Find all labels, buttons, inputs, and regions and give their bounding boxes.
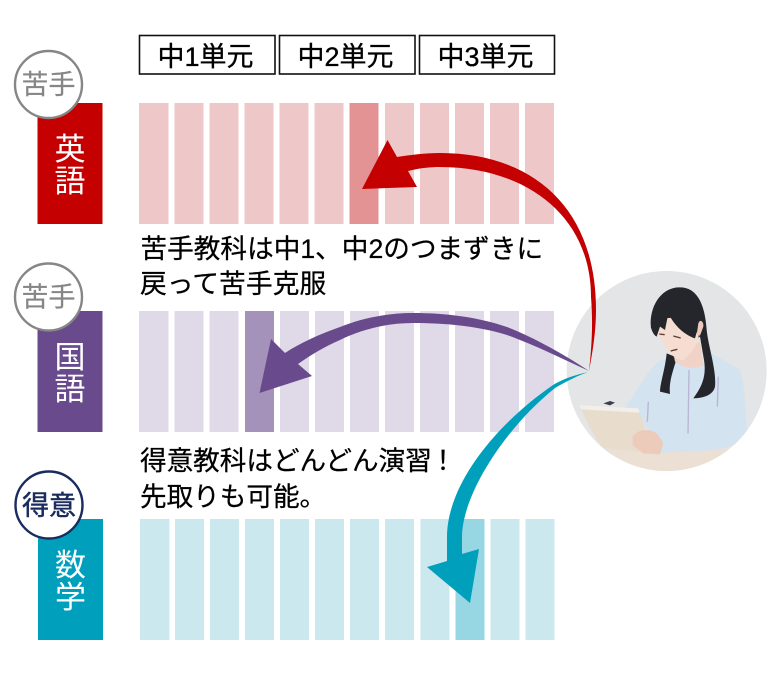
- header: grade 1 units: [140, 36, 275, 74]
- arrow: teal, to Math grade 3 unit: [427, 372, 588, 603]
- subject label: Japanese: [38, 311, 102, 432]
- shirt seams: [647, 370, 718, 433]
- pen: [603, 401, 615, 405]
- neck: [673, 342, 703, 368]
- shirt: [625, 353, 747, 453]
- English unit bars: [139, 103, 554, 224]
- text: weak subjects advice: 苦手教科は中1、中2のつまずきに: [140, 234, 543, 264]
- unit header row: [140, 36, 554, 74]
- eyes and mouth: [659, 334, 681, 351]
- subject label: Math: [38, 519, 103, 640]
- desk: [605, 450, 728, 471]
- text: strong subjects advice: 先取りも可能。: [140, 482, 326, 512]
- subject label: English: [38, 103, 102, 224]
- badge: weak subject (English): [15, 51, 82, 118]
- badge: strong subject (Math): 得意: [22, 491, 76, 521]
- header: grade 2 units: [280, 36, 415, 74]
- badge: strong subject (Math): [16, 472, 82, 538]
- text: weak subjects advice: 戻って苦手克服: [140, 269, 326, 299]
- text: weak subjects advice: [140, 234, 543, 299]
- subject label: Japanese: 国: [54, 340, 86, 375]
- header: grade 2 units: 中2単元: [297, 42, 394, 72]
- header: grade 3 units: [420, 36, 554, 74]
- header: grade 1 units: 中1単元: [157, 42, 254, 72]
- text: strong subjects advice: 得意教科はどんどん演習！: [140, 446, 456, 476]
- subject label: English: 英: [54, 132, 86, 167]
- Math unit bars: [140, 519, 554, 640]
- face: [655, 318, 699, 360]
- badge: weak subject (English): 苦手: [22, 70, 76, 100]
- fringe: [650, 318, 697, 338]
- text: strong subjects advice: [140, 446, 456, 512]
- subject label: Math: 学: [55, 580, 86, 615]
- Japanese unit bars: [139, 311, 554, 432]
- header: grade 3 units: 中3単元: [437, 42, 534, 72]
- subject label: Math: 数: [55, 548, 86, 583]
- badge: weak subject (Japanese): 苦手: [22, 282, 76, 312]
- subject label: English: 語: [54, 164, 86, 199]
- subject label: Japanese: 語: [54, 372, 86, 407]
- hair back: [651, 287, 715, 398]
- left hair lock: [660, 353, 677, 394]
- arrow: red, to English grade 2 unit: [362, 140, 596, 371]
- badge: weak subject (Japanese): [15, 264, 82, 330]
- tablet top edge: [579, 405, 639, 413]
- tablet: [580, 408, 645, 450]
- arrow: purple, to Japanese grade 1 unit: [260, 313, 589, 393]
- hand: [633, 430, 663, 454]
- ear: [697, 321, 703, 336]
- photo: student with tablet: [560, 271, 773, 477]
